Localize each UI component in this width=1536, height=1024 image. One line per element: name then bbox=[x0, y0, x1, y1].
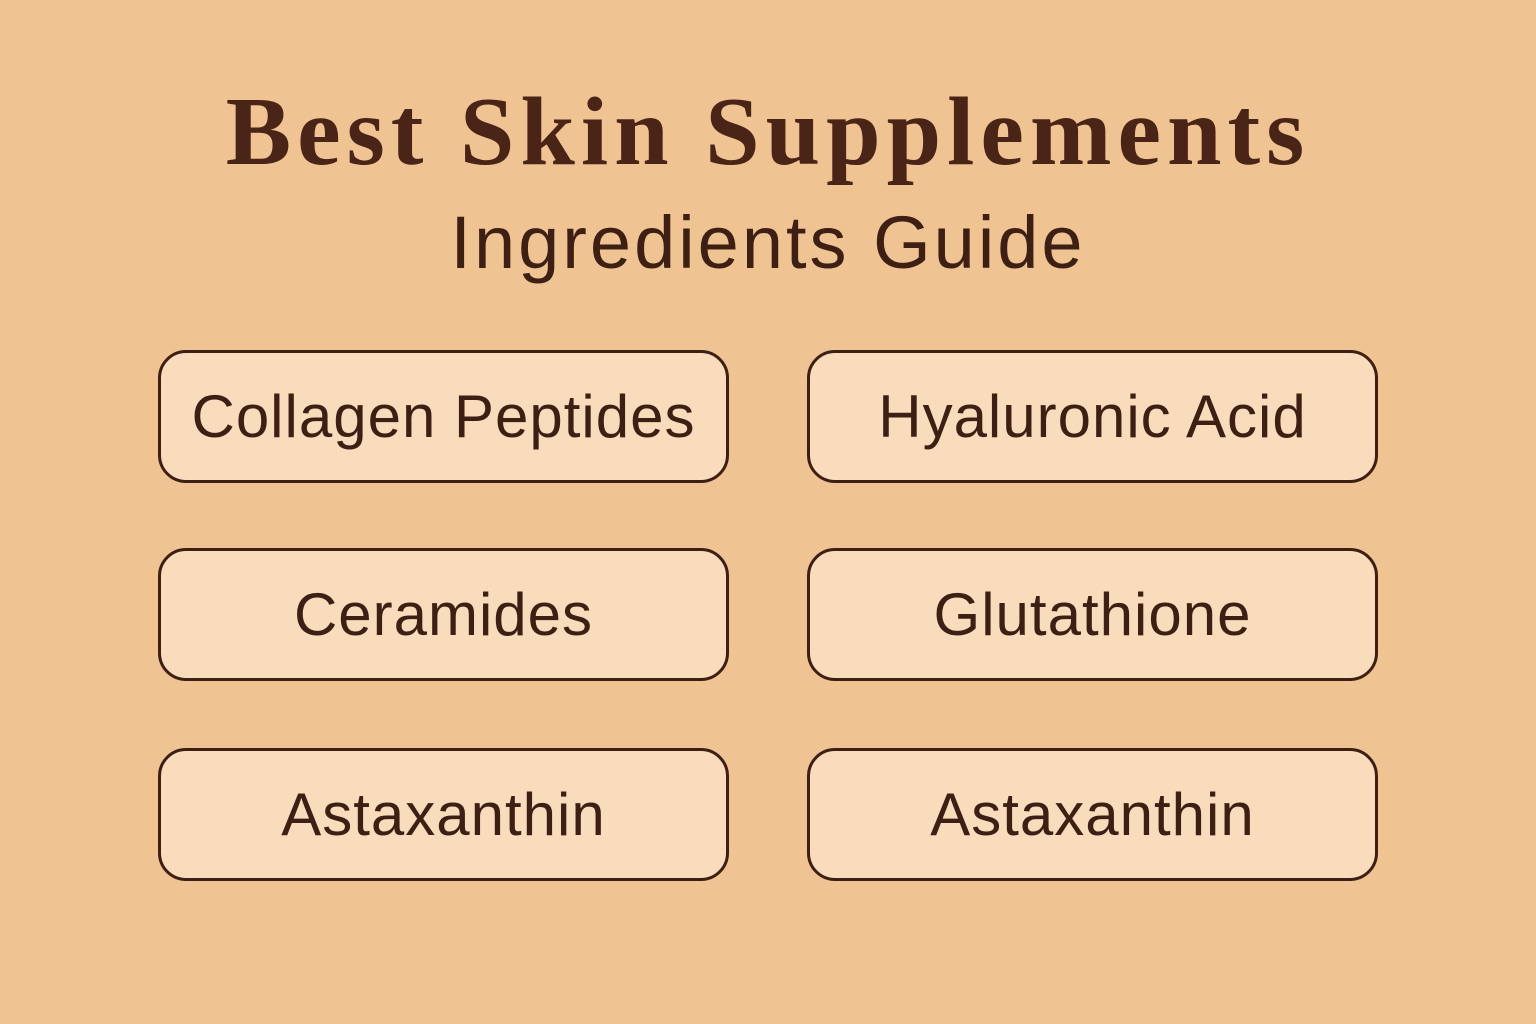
subtitle: Ingredients Guide bbox=[450, 201, 1086, 284]
box: Astaxanthin left bbox=[158, 748, 729, 881]
box: Collagen Peptides: Collagen Peptides bbox=[191, 383, 696, 450]
box: Hyaluronic Acid: Hyaluronic Acid bbox=[878, 383, 1307, 450]
box: Astaxanthin right bbox=[807, 748, 1378, 881]
box: Hyaluronic Acid bbox=[807, 350, 1378, 483]
title: Best Skin Supplements bbox=[226, 78, 1310, 186]
box: Ceramides: Ceramides bbox=[294, 581, 593, 648]
box: Astaxanthin left: Astaxanthin bbox=[281, 781, 606, 848]
box: Collagen Peptides bbox=[158, 350, 729, 483]
box: Glutathione bbox=[807, 548, 1378, 681]
box: Glutathione: Glutathione bbox=[934, 581, 1251, 648]
box: Ceramides bbox=[158, 548, 729, 681]
box: Astaxanthin right: Astaxanthin bbox=[930, 781, 1255, 848]
